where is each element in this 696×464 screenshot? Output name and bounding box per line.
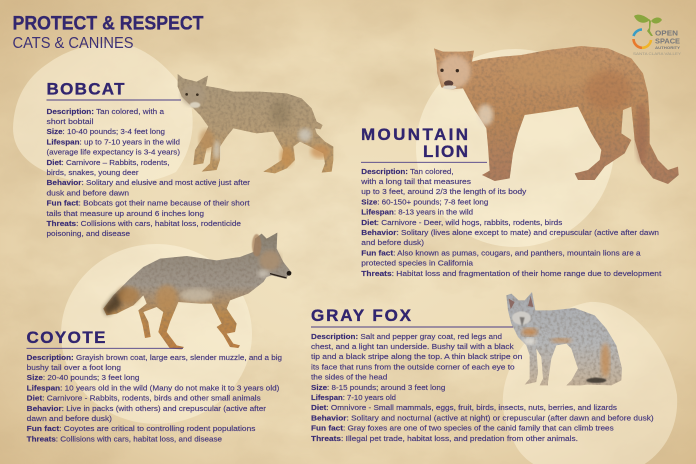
blob: coyote backdrop bbox=[61, 244, 252, 424]
heading: mountain lion: MOUNTAIN bbox=[361, 125, 468, 144]
facts: coyote: Size: 20-40 pounds; 3 feet long bbox=[27, 373, 139, 382]
facts: mountain lion: Description: Tan colored, bbox=[361, 167, 454, 176]
heading: coyote: COYOTE bbox=[26, 328, 106, 347]
logo text: OPEN bbox=[655, 28, 678, 38]
facts: bobcat bbox=[46, 107, 250, 238]
blob: mountain lion backdrop bbox=[416, 49, 614, 247]
facts: mountain lion: protected species in California bbox=[361, 259, 474, 268]
facts: mountain lion: Behavior : Solitary (lives alone except to mate) and crepuscular (active after dawn bbox=[361, 228, 659, 237]
facts: coyote: Threats: Collisions with cars, habitat loss, and disease bbox=[27, 434, 222, 443]
facts: gray fox: Behavior : Solitary and nocturnal (active at night) or crepuscular (after dawn and before dusk) bbox=[311, 413, 654, 422]
facts: gray fox: Fun fact : Gray foxes are one of two species of the canid family that can climb trees bbox=[311, 424, 614, 433]
facts: gray fox: its face that runs from the outside corner of each eye to bbox=[311, 362, 515, 371]
heading: bobcat: BOBCAT bbox=[46, 80, 125, 99]
facts: bobcat: Threats: Collisions with cars, habitat loss, rodenticide bbox=[46, 219, 241, 228]
panel: gray fox bbox=[311, 306, 654, 443]
facts: coyote: dawn and before dusk) bbox=[27, 414, 112, 423]
facts: bobcat: poisoning, and disease bbox=[46, 229, 130, 238]
subtitle: CATS & CANINES bbox=[12, 35, 134, 52]
facts: gray fox: Threats : Illegal pet trade, habitat loss, and predation from other animals. bbox=[311, 434, 578, 443]
logo text: AUTHORITY bbox=[655, 45, 680, 50]
heading: gray fox: GRAY FOX bbox=[311, 306, 412, 325]
facts: bobcat: dusk and before dawn bbox=[46, 188, 129, 197]
animal: bobcat bbox=[178, 74, 333, 173]
facts: coyote bbox=[27, 353, 282, 443]
facts: mountain lion: with a long tail that measures bbox=[360, 177, 471, 186]
panel: mountain lion bbox=[360, 125, 662, 278]
facts: bobcat: birds, snakes, young deer bbox=[46, 168, 139, 177]
facts: mountain lion bbox=[360, 167, 662, 278]
facts: bobcat: short bobtail bbox=[46, 117, 94, 126]
facts: mountain lion: Lifespan: 8-13 years in the wild bbox=[361, 208, 473, 217]
facts: mountain lion: Size: 60-150+ pounds; 7-8 feet long bbox=[361, 197, 488, 206]
blob: bobcat backdrop bbox=[13, 43, 193, 184]
facts: gray fox bbox=[311, 332, 654, 443]
panel: bobcat bbox=[46, 80, 250, 238]
facts: coyote: bushy tail over a foot long bbox=[27, 363, 121, 372]
facts: bobcat: Behavior : Solitary and elusive and most active just after bbox=[46, 178, 250, 187]
logo text: SANTA CLARA VALLEY bbox=[633, 52, 682, 56]
facts: bobcat: Description: Tan colored, with a bbox=[46, 107, 165, 116]
facts: mountain lion: up to 3 feet, around 2/3 the length of its body bbox=[361, 187, 526, 196]
facts: coyote: Diet: Carnivore - Rabbits, rodents, birds and other small animals bbox=[27, 394, 261, 403]
facts: mountain lion: Fun fact: Also known as pumas, cougars, and panthers, mountain lions are a bbox=[361, 248, 641, 257]
logo: Open Space Authority bbox=[633, 15, 682, 56]
facts: coyote: Description: Grayish brown coat, large ears, slender muzzle, and a big bbox=[27, 353, 282, 362]
facts: bobcat: Size: 10-40 pounds; 3-4 feet long bbox=[46, 127, 165, 136]
panel: coyote bbox=[26, 328, 282, 443]
facts: bobcat: Fun fact : Bobcats got their name because of their short bbox=[46, 199, 250, 208]
facts: bobcat: (average life expectancy is 3-4 years) bbox=[46, 148, 180, 157]
logo text bbox=[633, 28, 682, 56]
facts: coyote: Lifespan: 10 years old in the wild (Many do not make it to 3 years old) bbox=[27, 383, 280, 392]
facts: gray fox: Diet: Omnivore - Small mammals, eggs, fruit, birds, insects, nuts, berries, and lizards bbox=[311, 403, 617, 412]
logo icon: sprout bbox=[634, 15, 662, 36]
facts: gray fox: chest, and a light tan underside. Bushy tail with a black bbox=[311, 342, 514, 351]
facts: coyote: Behavior : Live in packs (with others) and crepuscular (active after bbox=[27, 404, 266, 413]
blob: gray fox backdrop bbox=[503, 302, 677, 464]
facts: bobcat: Lifespan: up to 7-10 years in the wild bbox=[46, 137, 180, 146]
facts: gray fox: Size: 8-15 pounds; around 3 feet long bbox=[311, 383, 445, 392]
facts: mountain lion: and before dusk) bbox=[361, 238, 424, 247]
logo text: SPACE bbox=[655, 36, 680, 46]
title: PROTECT & RESPECT bbox=[12, 12, 204, 34]
animal: gray fox bbox=[506, 292, 622, 385]
facts: mountain lion: Threats : Habitat loss and fragmentation of their home range due to development bbox=[361, 269, 662, 278]
facts: gray fox: the sides of the head bbox=[311, 373, 387, 382]
animal: mountain lion bbox=[434, 46, 679, 184]
title block bbox=[12, 12, 204, 52]
facts: gray fox: Lifespan: 7-10 years old bbox=[311, 393, 396, 402]
facts: bobcat: Diet: Carnivore – Rabbits, rodents, bbox=[46, 158, 170, 167]
facts: bobcat: tails that measure up around 6 inches long bbox=[46, 209, 204, 218]
heading: mountain lion bbox=[361, 125, 468, 161]
heading: mountain lion: LION bbox=[423, 142, 468, 161]
facts: gray fox: Description: Salt and pepper gray coat, red legs and bbox=[311, 332, 502, 341]
logo icon: ring bbox=[634, 30, 651, 48]
animal: coyote bbox=[103, 233, 292, 349]
facts: coyote: Fun fact : Coyotes are critical to controlling rodent populations bbox=[27, 424, 256, 433]
facts: mountain lion: Diet: Carnivore - Deer, wild hogs, rabbits, rodents, birds bbox=[361, 218, 562, 227]
facts: gray fox: tip and a black stripe along the top. A thin black stripe on bbox=[311, 352, 522, 361]
